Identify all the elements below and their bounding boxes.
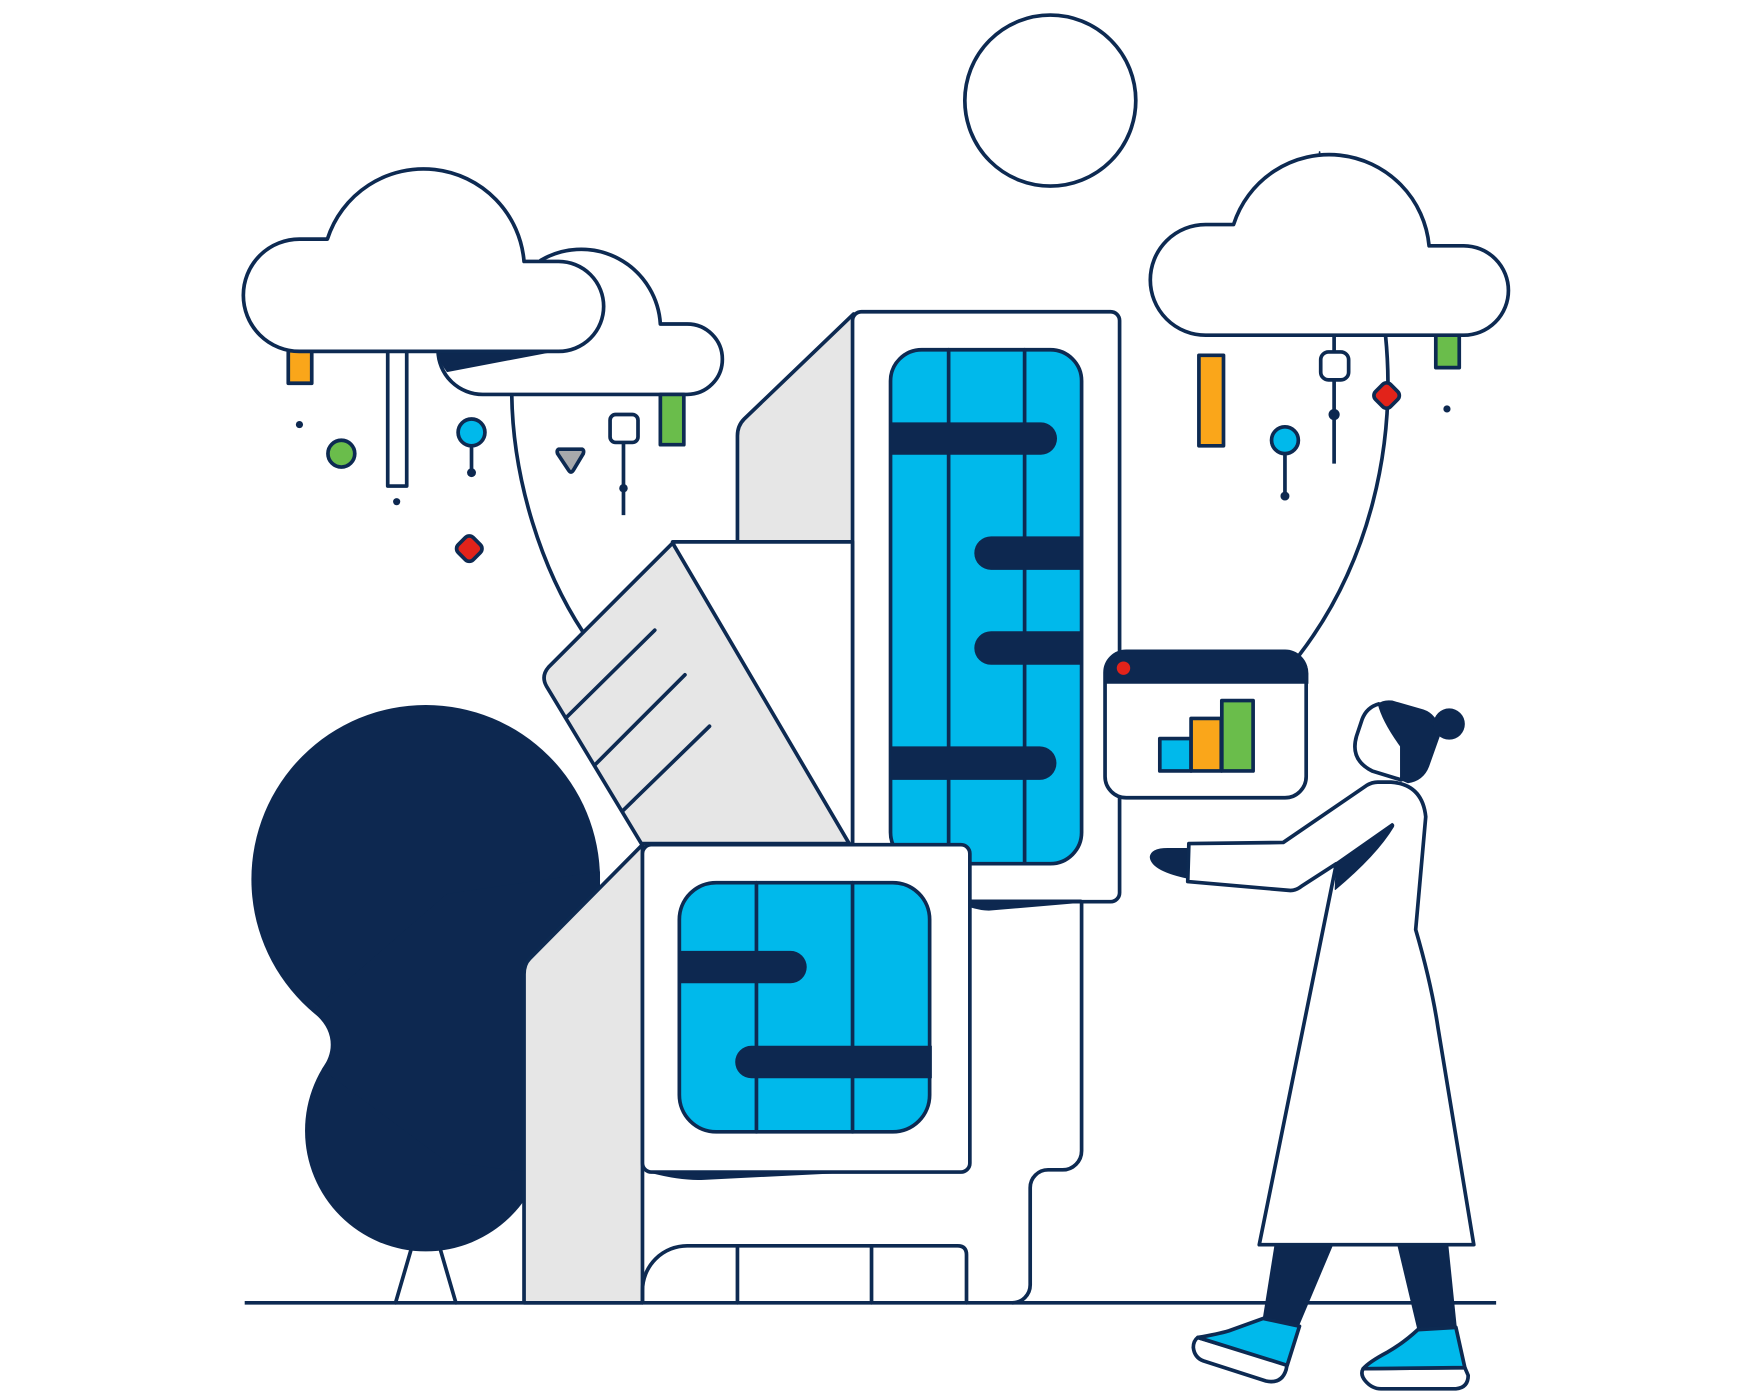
legs (1263, 1242, 1457, 1332)
large server shadow (970, 899, 1082, 911)
large server panel (853, 312, 1120, 902)
lower panel side face (524, 845, 642, 1303)
tree (251, 705, 600, 1303)
ground line (245, 1301, 1496, 1304)
woman figure (1150, 700, 1474, 1389)
left cloud hanging bars and markers (288, 351, 684, 564)
large server side face (737, 314, 854, 542)
folded sheet back (673, 542, 853, 845)
bar chart (1160, 701, 1253, 771)
lower body outline (1012, 901, 1082, 1303)
underarm shadow (1335, 823, 1394, 889)
seat base (642, 1246, 967, 1303)
left back cloud outline (438, 249, 722, 394)
cloud shadow (438, 351, 559, 372)
hand (1150, 848, 1191, 879)
coat (1188, 782, 1474, 1245)
left back cloud (438, 249, 722, 394)
lower body of machine (642, 894, 1082, 1303)
left front cloud (243, 169, 604, 351)
folded gray sheet (544, 543, 849, 844)
lower panel blue screen (679, 883, 932, 1132)
left shoe (1193, 1318, 1299, 1382)
browser window chart (1104, 650, 1308, 798)
lower panel shadow (645, 1171, 883, 1180)
connector arcs (512, 335, 1388, 655)
right cloud hanging bars and markers (1199, 335, 1459, 501)
lower panel (642, 845, 970, 1172)
sun circle (965, 15, 1136, 186)
right cloud (1150, 152, 1508, 335)
hair and bun (1378, 700, 1465, 783)
face (1355, 704, 1408, 780)
right shoe (1362, 1327, 1468, 1389)
large server blue screen (891, 350, 1082, 864)
